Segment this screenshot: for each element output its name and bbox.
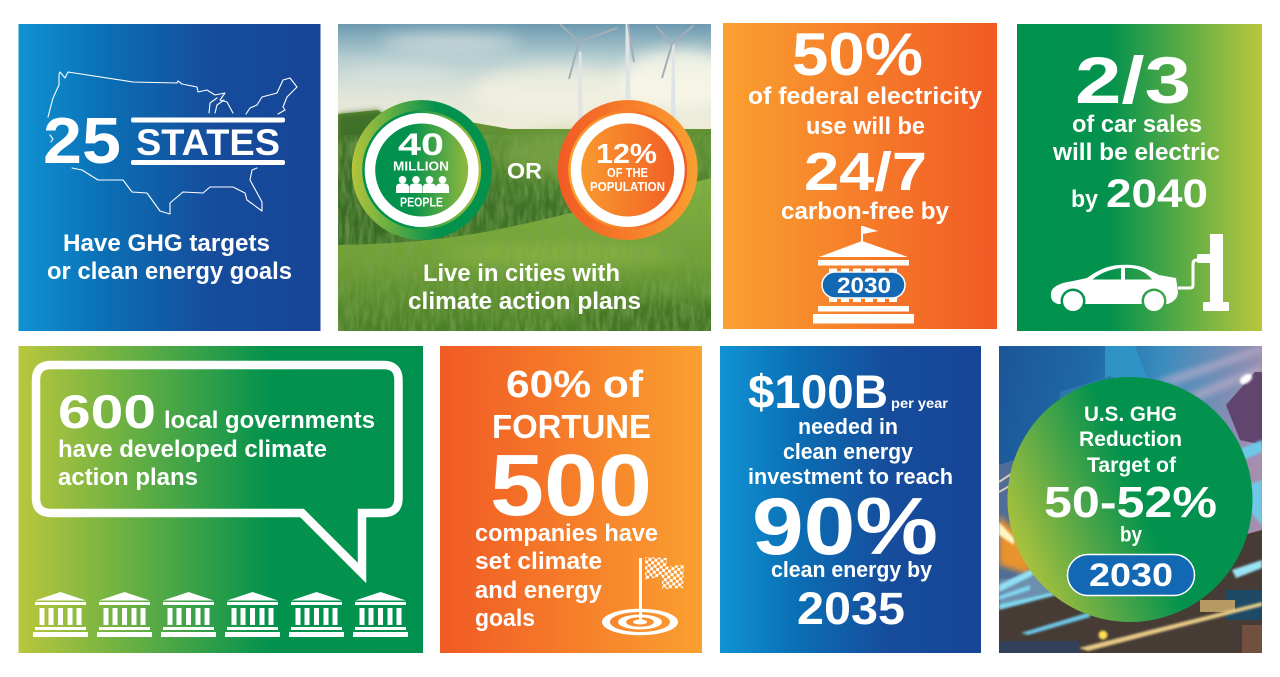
circle: 12% of the population: OF THE <box>607 166 648 180</box>
panel: Fortune 500 <box>440 346 702 653</box>
panel: US GHG reduction target <box>999 346 1262 653</box>
panel: car sales <box>1017 24 1262 331</box>
text: of federal electricity use will be: use will be <box>806 113 925 140</box>
text: companies have set climate and energy goals: set climate <box>475 548 602 575</box>
text: by: by <box>1120 524 1142 546</box>
speech bubble <box>36 365 398 573</box>
circle: 12% of the population: POPULATION <box>590 180 665 194</box>
text: by 2040 <box>1071 172 1208 216</box>
circle: 40 million people <box>352 100 492 240</box>
text: by 2040: 2040 <box>1106 172 1208 216</box>
panel: 600 local governments <box>18 346 423 653</box>
panel: cities with climate action plans <box>338 24 740 336</box>
circle: green badge <box>1008 377 1252 622</box>
big number 90%: 90% <box>752 482 938 572</box>
text: U.S. GHG Reduction Target of: Target of <box>1087 454 1177 477</box>
big number 2/3: 2/3 <box>1075 43 1191 117</box>
big number 24/7: 24/7 <box>804 142 927 202</box>
icon: flag in target <box>602 557 684 635</box>
panel: federal electricity <box>723 21 997 329</box>
text: U.S. GHG Reduction Target of: U.S. GHG <box>1084 403 1177 426</box>
icon: government building with 2030: 2030 <box>837 273 891 298</box>
text: local governments have developed climate action plans: have developed climate <box>58 436 327 463</box>
text: of federal electricity use will be <box>748 83 983 140</box>
big number 50-52%: 50-52% <box>1044 478 1217 527</box>
text: needed in clean energy investment to reach <box>748 414 953 489</box>
text: needed in clean energy investment to reach: clean energy <box>783 439 913 464</box>
icon: people <box>396 176 449 193</box>
text: of federal electricity use will be: of federal electricity <box>748 83 983 110</box>
big number 500: 500 <box>490 437 652 534</box>
text: local governments have developed climate action plans: local governments <box>164 407 375 434</box>
caption <box>408 260 641 315</box>
big number 600: 600 <box>58 385 156 438</box>
text: clean energy by: clean energy by <box>771 557 932 582</box>
text: FORTUNE: FORTUNE <box>492 408 651 445</box>
text: companies have set climate and energy goals: and energy <box>475 577 602 604</box>
caption: climate action plans <box>408 288 641 315</box>
icons: six government buildings <box>33 592 408 637</box>
panel: 25 states <box>18 24 320 331</box>
photo: wind farm landscape <box>338 24 740 336</box>
text: 60% of: 60% of <box>506 364 643 406</box>
big number 2035: 2035 <box>797 583 905 634</box>
text: companies have set climate and energy goals: goals <box>475 605 535 632</box>
caption: Have GHG targets <box>63 230 270 257</box>
text: local governments have developed climate action plans: action plans <box>58 464 198 491</box>
big number $100B per year: per year <box>891 396 949 411</box>
text: companies have set climate and energy goals <box>475 520 658 632</box>
circle: 12% of the population: 12% <box>596 138 657 169</box>
circle: 40 million people: 40 <box>398 126 444 162</box>
text: of car sales will be electric: of car sales <box>1072 111 1202 138</box>
caption: Live in cities with <box>423 260 620 287</box>
text: by 2040: by <box>1071 186 1099 213</box>
big number 25: 25 <box>43 104 121 177</box>
text: of car sales will be electric <box>1052 111 1220 166</box>
big number $100B per year <box>748 365 949 418</box>
label: OR: OR <box>507 158 542 184</box>
panel: clean energy investment <box>720 346 981 653</box>
heading: STATES with rules: STATES <box>136 121 280 163</box>
text: companies have set climate and energy goals: companies have <box>475 520 658 547</box>
text: needed in clean energy investment to reach: investment to reach <box>748 464 953 489</box>
icon: electric car charging <box>1051 234 1229 314</box>
icon: government building with 2030 <box>813 226 914 324</box>
text: local governments have developed climate action plans <box>58 407 375 491</box>
circle: 40 million people: PEOPLE <box>400 196 443 210</box>
caption: or clean energy goals <box>47 258 292 285</box>
big number 50%: 50% <box>792 21 923 88</box>
text: needed in clean energy investment to reach: needed in <box>798 414 898 439</box>
circle: 12% of the population <box>558 100 698 240</box>
text: U.S. GHG Reduction Target of: Reduction <box>1079 428 1182 451</box>
badge: 2030: 2030 <box>1089 557 1173 593</box>
text: of car sales will be electric: will be electric <box>1052 139 1220 166</box>
text: carbon-free by: carbon-free by <box>781 198 950 225</box>
circle: 40 million people: MILLION <box>393 160 449 174</box>
caption <box>47 230 292 285</box>
big number $100B per year: $100B <box>748 365 888 418</box>
badge: 2030 <box>1068 554 1194 596</box>
text: U.S. GHG Reduction Target of <box>1079 403 1182 477</box>
photo: city light trails <box>999 346 1262 653</box>
icon: US map outline <box>48 72 297 214</box>
